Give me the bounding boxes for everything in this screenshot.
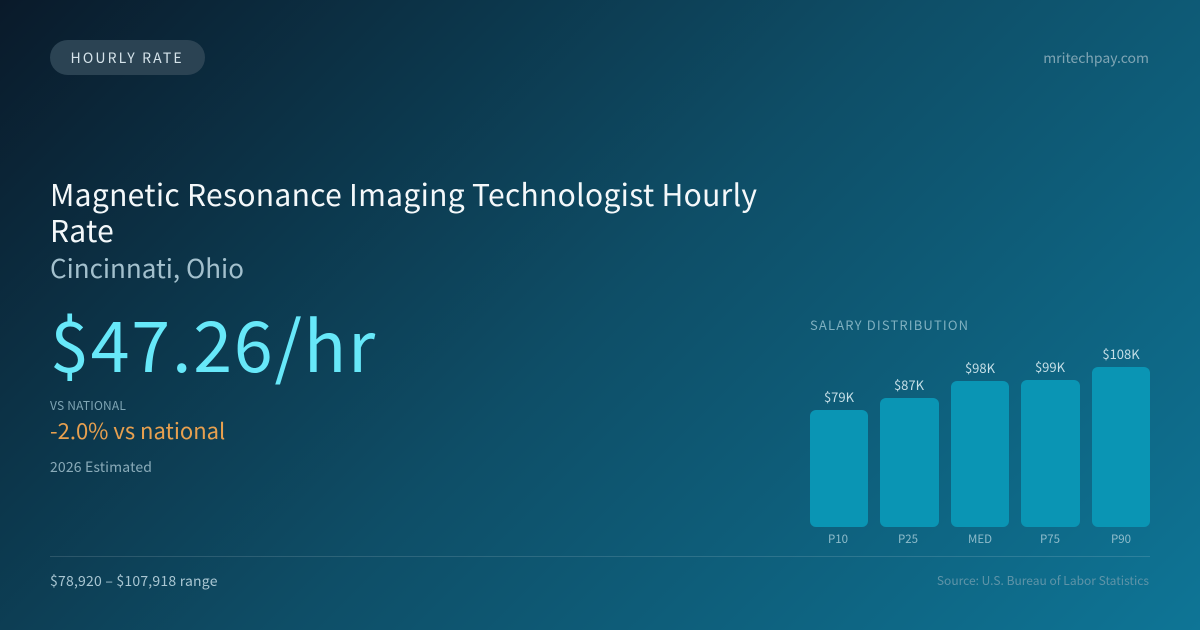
value: median: $98K (965, 358, 995, 377)
value: P90: $108K (1102, 344, 1140, 363)
axis label: P25: P25 (898, 531, 918, 547)
source: Source: U.S. Bureau of Labor Statistics (937, 572, 1149, 589)
comparison label: VS NATIONAL (50, 397, 126, 414)
headline hourly rate: $47.26/hr (50, 292, 377, 393)
comparison value: -2.0% vs national (50, 414, 225, 446)
value: P75: $99K (1035, 357, 1065, 376)
bar: P10 (810, 410, 868, 527)
value: P10: $79K (824, 387, 854, 406)
estimate year: 2026 Estimated (50, 457, 152, 477)
badge: hourly rate (50, 40, 205, 75)
axis label: P75: P75 (1040, 531, 1060, 547)
bar: P25 (880, 398, 939, 527)
bar: P75 (1021, 380, 1080, 527)
title: Magnetic Resonance Imaging Technologist Hourly Rate (50, 171, 757, 251)
value: P25: $87K (894, 375, 924, 394)
axis label: P10: P10 (828, 531, 848, 547)
axis label: median: MED (968, 531, 992, 547)
badge label: HOURLY RATE (70, 48, 184, 68)
chart heading: SALARY DISTRIBUTION (810, 315, 969, 334)
subtitle: location: Cincinnati, Ohio (50, 249, 244, 286)
bar: P90 (1092, 367, 1150, 527)
salary range: $78,920 – $107,918 range (50, 571, 218, 591)
site name: mritechpay.com (1043, 48, 1149, 68)
bar: median (951, 381, 1009, 527)
axis label: P90: P90 (1111, 531, 1131, 547)
